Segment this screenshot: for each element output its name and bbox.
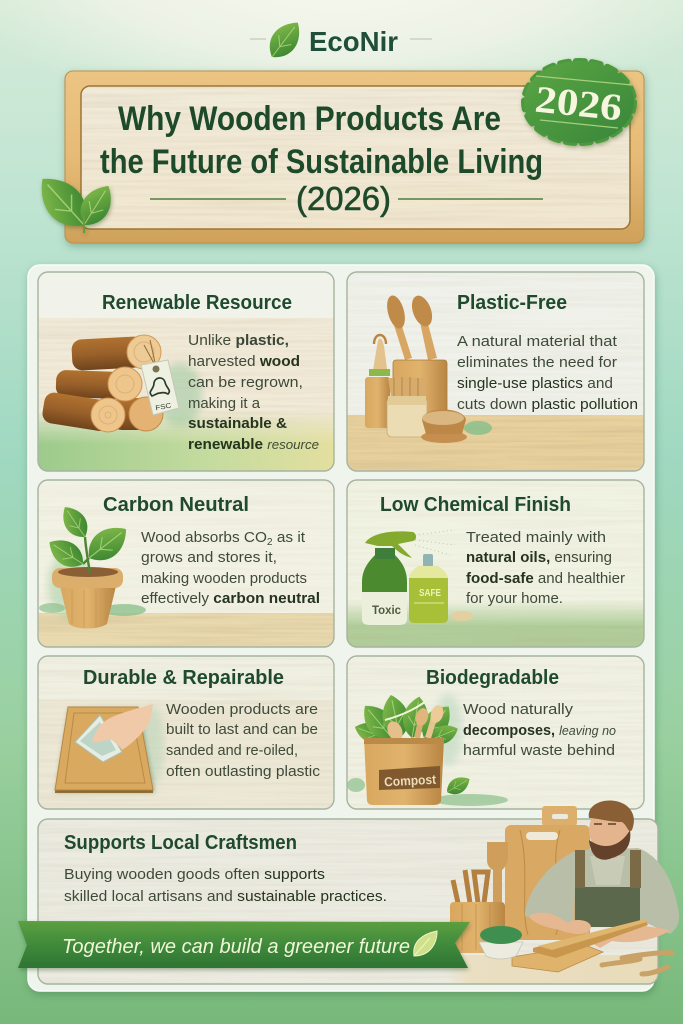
illustration: craftsman at workbench [450,800,679,974]
icon: log pile with FSC tag [41,335,179,432]
text block: skilled local artisans and sustainable practices. [64,888,387,905]
icon: bamboo toothbrushes and containers [365,293,467,443]
text block [466,529,625,607]
text block [141,529,320,607]
text block: built to last and can be [166,721,318,738]
icon: corner leaves [29,167,120,237]
text block [457,333,638,413]
title text: Why Wooden Products Are [118,100,501,138]
icon: spray bottles [362,530,473,625]
text block: can be regrown, [188,374,303,391]
text block: Wood absorbs CO [141,529,264,546]
main panel [28,265,654,991]
heading: Carbon Neutral [103,494,249,516]
panel: Plastic-Free [347,272,644,471]
heading: Biodegradable [426,667,559,689]
panel: Biodegradable [347,656,644,809]
text block: Treated mainly with [466,529,606,546]
icon: cutting board and hand with cloth [55,704,153,793]
badge: 2026 [524,61,634,143]
text block: sanded and re-oiled, [166,742,298,759]
text block [463,701,616,759]
text block [188,332,319,453]
icon: spray bottles: Toxic [372,603,401,617]
panel: Renewable Resource [38,272,334,471]
text block: harvested wood [188,353,300,370]
slogan: Together, we can build a greener future [62,936,410,958]
text block: harmful waste behind [463,742,615,759]
text block: renewable resource [188,436,319,453]
panel: Supports Local Craftsmen [38,819,658,984]
text block: eliminates the need for [457,354,617,371]
panel: Low Chemical Finish [347,480,644,647]
badge: 2026: 2026 [533,79,624,129]
text block: Unlike plastic, [188,332,289,349]
text block: making wooden products [141,570,307,587]
text block: making it a [188,395,261,412]
text block: cuts down plastic pollution [457,396,638,413]
icon: compost bucket: Compost [384,772,437,789]
banner: closing message [18,921,470,968]
title text: the Future of Sustainable Living [100,143,543,181]
text block: Wood naturally [463,701,574,718]
text block: often outlasting plastic [166,763,321,780]
text block [64,866,387,905]
heading: Renewable Resource [102,292,292,314]
panel: Durable & Repairable [38,656,334,809]
text block: sustainable & [188,415,287,432]
title text [100,100,543,217]
text block: decomposes, leaving no [463,722,616,739]
text block: Buying wooden goods often supports [64,866,325,883]
heading: Durable & Repairable [83,667,284,689]
logo: EcoNir [309,26,398,57]
text block: effectively carbon neutral [141,590,320,607]
icon: potted seedling [43,501,135,628]
title board [65,71,644,243]
icon: log pile with FSC tag: FSC [155,403,172,412]
text block: single-use plastics and [457,375,613,392]
icon: spray bottles: SAFE [419,588,441,599]
text block: food-safe and healthier [466,570,625,587]
heading: Supports Local Craftsmen [64,832,297,854]
logo [250,15,432,65]
panel: Carbon Neutral [38,480,334,647]
heading: Low Chemical Finish [380,494,571,516]
icon: compost bucket [352,692,473,805]
text block: for your home. [466,590,563,607]
title text: (2026) [296,180,391,217]
icon: ribbon leaf [414,931,437,956]
text block: as it [273,529,306,546]
heading: Plastic-Free [457,292,567,314]
text block: Wooden products are [166,701,318,718]
text block: 2 [267,537,273,548]
text block: natural oils, ensuring [466,549,612,566]
text block: A natural material that [457,333,618,350]
text block [166,701,321,780]
text block: grows and stores it, [141,549,277,566]
